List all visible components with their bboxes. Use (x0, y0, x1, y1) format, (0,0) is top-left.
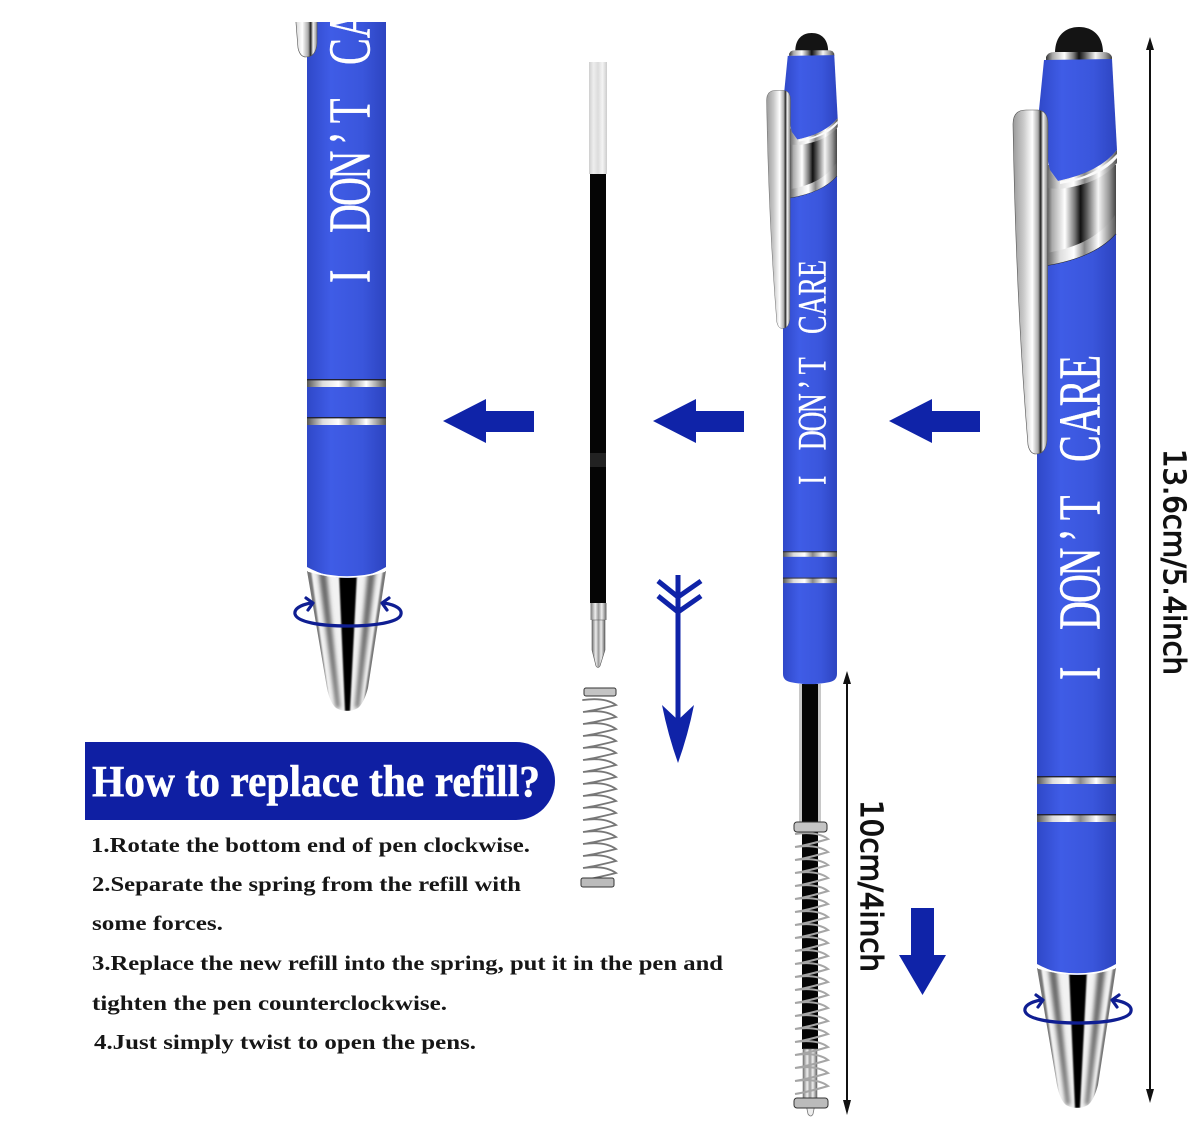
step 3 continued: tighten the pen counterclockwise. (92, 991, 447, 1015)
dimension arrow: pen length (1146, 37, 1154, 1103)
pen text: middle: I (791, 476, 835, 485)
pen text: left: I (317, 270, 382, 283)
pen: right, large (1013, 27, 1131, 1108)
step 2 continued: some forces. (92, 911, 223, 935)
heading text: How to replace the refill? (92, 757, 540, 806)
arrow: left from middle pen (653, 399, 744, 443)
arrow: thick down (899, 908, 946, 995)
step 4: 4.Just simply twist to open the pens. (94, 1030, 476, 1054)
pen: middle, assembled (767, 33, 838, 684)
heading banner (85, 742, 555, 820)
pen text: left: DON’T (317, 99, 382, 233)
pen text: middle: DON’T (791, 357, 835, 450)
instructions (91, 833, 723, 1054)
arrow: left from refill (443, 399, 534, 443)
dimension label: 13.6cm / 5.4inch: 13.6cm/5.4inch (1156, 449, 1191, 675)
arrow: fletched down arrow (658, 575, 701, 763)
pen text: middle: CARE (791, 260, 835, 334)
step 2: 2.Separate the spring from the refill with (92, 872, 521, 896)
arrow: left from large pen (889, 399, 980, 443)
pen: left, disassembly view (283, 0, 401, 711)
spring: loose (581, 688, 616, 887)
step 3: 3.Replace the new refill into the spring, put it in the pen and (92, 951, 723, 975)
refill and spring under middle pen (794, 684, 828, 1116)
refill (589, 62, 607, 668)
step 1: 1.Rotate the bottom end of pen clockwise. (91, 833, 530, 857)
dimension label: 10cm / 4inch: 10cm/4inch (853, 800, 888, 972)
dimension arrow: refill length (843, 671, 851, 1115)
pen text: right: DON’T (1047, 496, 1112, 630)
pen text: right: CARE (1047, 355, 1112, 462)
pen text: right: I (1047, 667, 1112, 680)
